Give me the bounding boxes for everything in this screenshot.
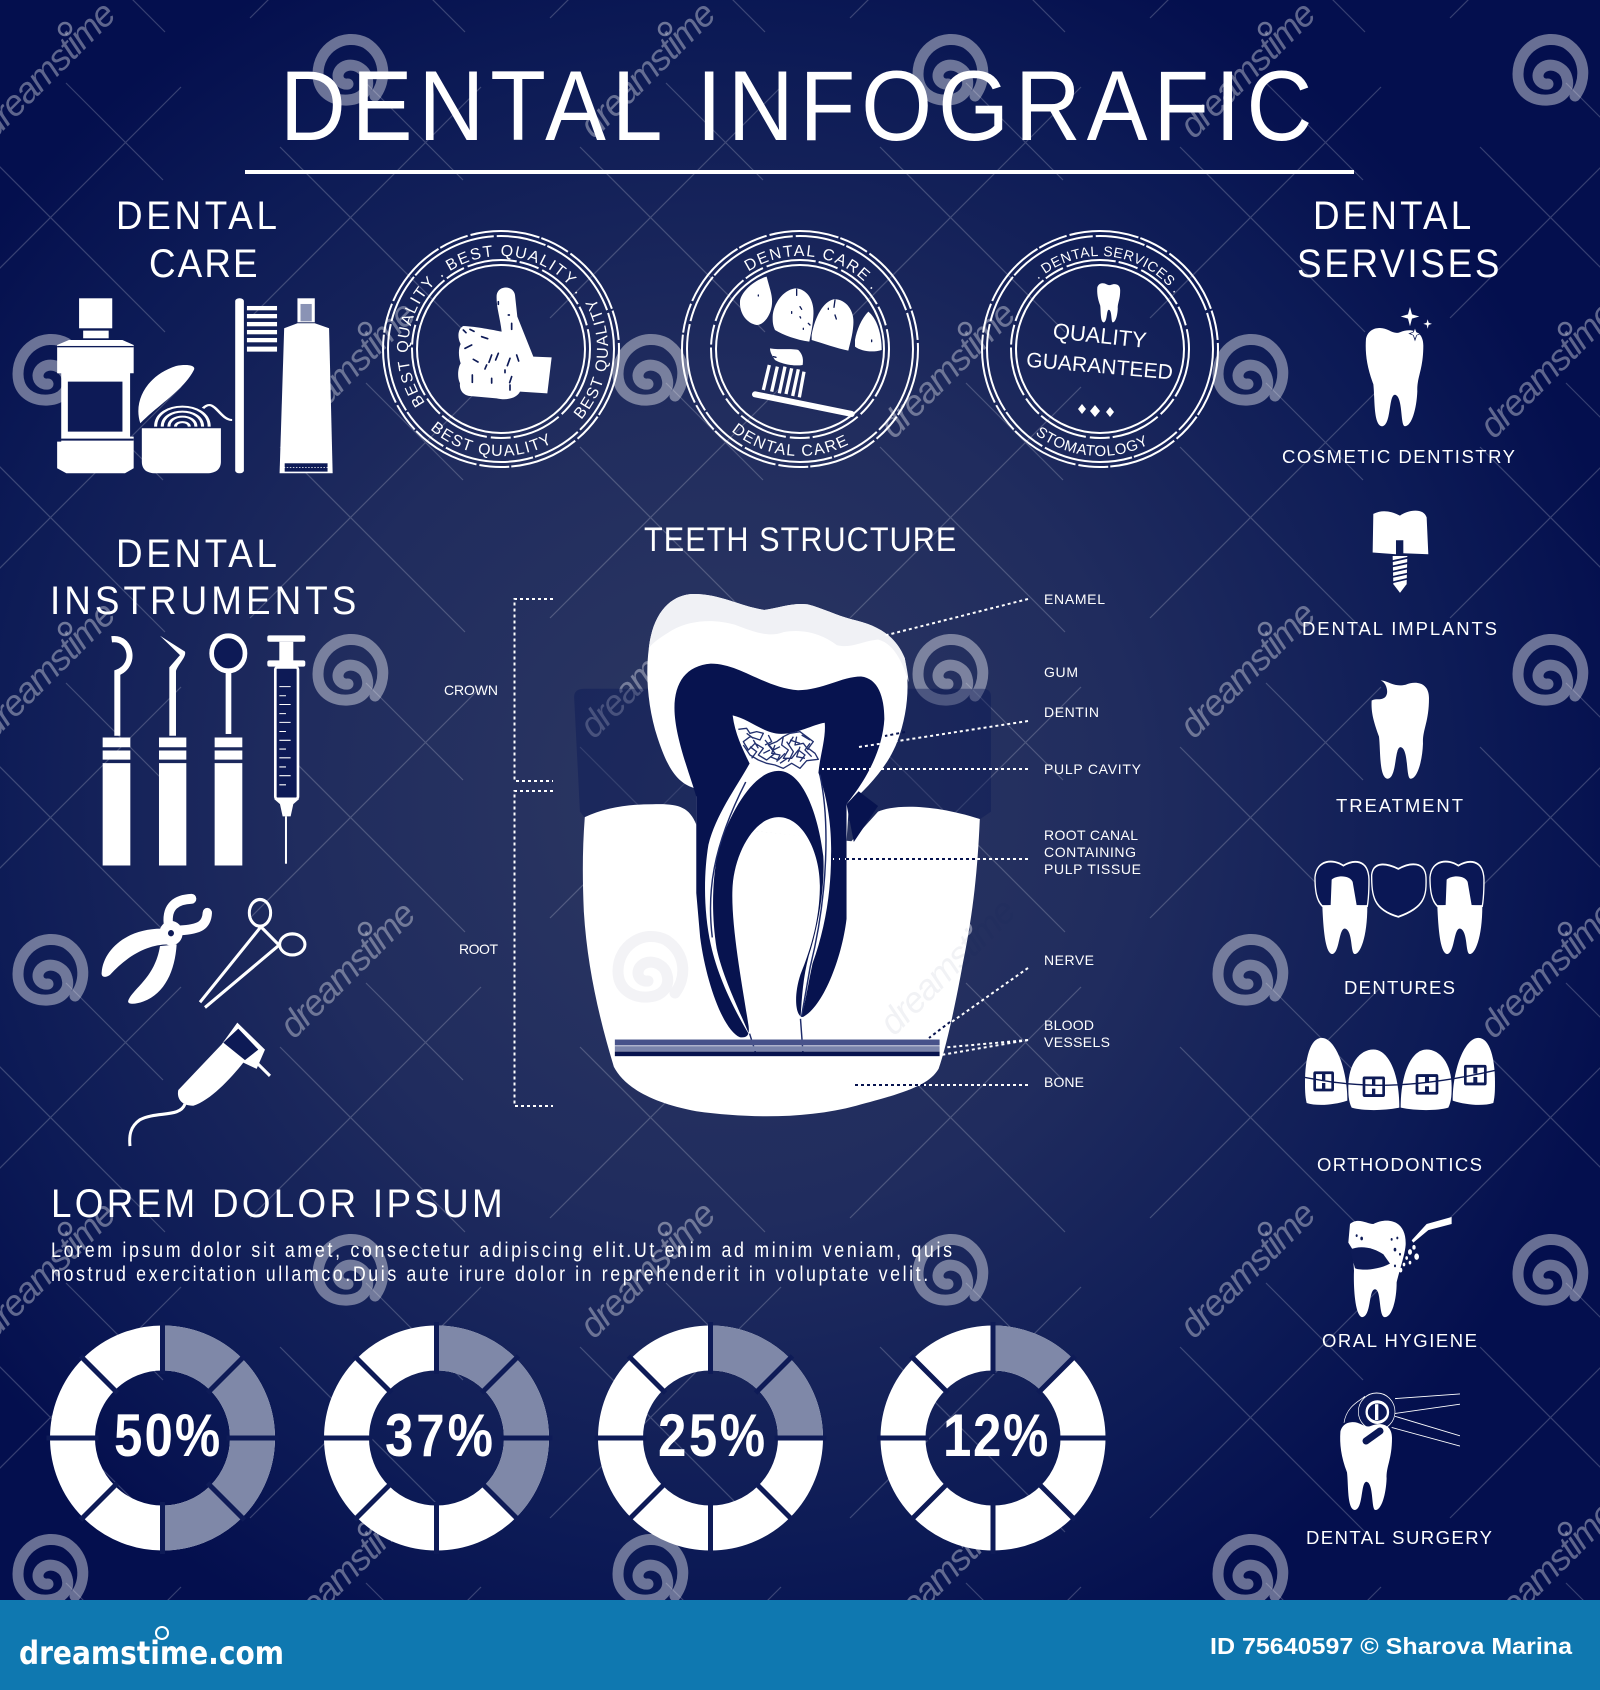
heading: dental care: DENTAL [116,194,277,238]
icon: dental probes [103,636,245,865]
dentin [674,664,884,1037]
stamp: dental care: DENTAL CARE [732,423,848,456]
icon: braces [1305,1038,1495,1110]
icon: surgery tooth [1340,1422,1392,1510]
body text: nostrud exercitation ullamco.Duis aute irure dolor in reprehenderit in voluptate velit. [51,1263,928,1286]
stamp: best quality: BEST QUALITY [574,302,610,419]
stamp: quality guaranteed [981,230,1219,468]
diagram labels: PULP CAVITY [1044,761,1142,777]
heading: dental instruments: DENTAL [116,532,277,576]
brackets and leader lines [514,599,1028,1106]
donut chart: 50%: 50% [114,1402,220,1469]
footer logo: dreamstime.com [19,1634,284,1672]
pulp cavity and root canals [705,715,831,1035]
watermark spirals and text: dreamstime [271,293,424,446]
body text [51,1239,952,1286]
services labels: DENTAL SURGERY [1306,1527,1492,1548]
dental care icons [57,298,333,473]
watermark spirals and text: dreamstime [1171,1193,1324,1346]
donut chart: 50% [46,1322,278,1554]
diagram labels: DENTIN [1044,704,1099,720]
services icons upper [1366,307,1432,779]
heading: dental instruments [50,532,356,623]
icon: toothbrush [235,298,277,473]
body text: Lorem ipsum dolor sit amet, consectetur adipiscing elit.Ut enim ad minim veniam, quis [51,1239,952,1262]
icon: dentures bridge [1315,862,1484,954]
icon: toothpaste tube [280,298,333,473]
heading: lorem dolor ipsum: LOREM DOLOR IPSUM [51,1182,503,1226]
bone [583,804,980,1116]
heading: dental servises [1297,194,1499,286]
icon: cosmetic tooth with sparkles [1366,307,1432,426]
donut chart: 25%: 25% [658,1402,765,1469]
heading: dental servises: DENTAL [1313,194,1471,238]
icon: thumbs up [458,287,552,399]
donut chart: 37%: 37% [385,1402,493,1469]
stamp: quality guaranteed: QUALITY [1052,318,1148,353]
donut chart: 37% [320,1322,552,1554]
watermark spirals and text: dreamstime [1171,593,1324,746]
heading: dental instruments: INSTRUMENTS [50,579,356,623]
dental instruments icons [102,635,305,1146]
heading: dental care [116,194,277,286]
diagram labels: ROOT [459,941,498,957]
stamp: quality guaranteed: STOMATOLOGY [1036,427,1145,456]
diagram labels [444,591,1142,1090]
watermark spirals and text: dreamstime [271,893,424,1046]
icon: mouthwash bottle [57,298,134,473]
diagram labels: BLOOD [1044,1017,1094,1033]
watermark spirals and text: dreamstime [571,593,724,746]
stamp: best quality: BEST QUALITY [431,421,548,458]
diagram: tooth cross-section [574,594,1024,1116]
diagram labels: CROWN [444,682,498,698]
diagram labels: ROOT CANAL [1044,827,1138,843]
icon: damaged tooth [1372,681,1429,779]
diagram labels: CONTAINING [1044,844,1136,860]
diagram labels: GUM [1044,664,1078,680]
nerve and blood vessel bands [615,1040,940,1056]
services labels: ORTHODONTICS [1317,1154,1482,1175]
donut chart: 25% [594,1322,826,1554]
tooth crown [647,594,908,841]
stamp: dental care [681,230,919,468]
stamp: quality guaranteed: . DENTAL SERVICES . [1038,246,1176,293]
services labels: DENTAL IMPLANTS [1302,618,1497,639]
icon: pliers [102,899,207,1004]
watermark spirals and text: dreamstime [871,293,1024,446]
stamp: dental care: DENTAL CARE . [744,245,872,290]
diagram labels: NERVE [1044,952,1094,968]
services labels [1282,446,1515,1548]
watermark spirals and text: dreamstime [571,1193,724,1346]
icon: teeth and toothbrush [740,277,882,414]
diagram labels: PULP TISSUE [1044,861,1141,877]
icon: dental implant [1373,511,1428,593]
services labels: DENTURES [1344,977,1455,998]
stamp: best quality: BEST QUALITY . [445,245,578,294]
donut chart: 12% [877,1322,1109,1554]
donut chart: 12%: 12% [943,1402,1048,1469]
services labels: ORAL HYGIENE [1322,1330,1477,1351]
pulp nerve network [738,728,818,768]
services labels: COSMETIC DENTISTRY [1282,446,1515,467]
icon: syringe [267,635,305,864]
icon: forceps [200,900,305,1008]
diagram labels: VESSELS [1044,1034,1110,1050]
icon: dental surgery instrument [1344,1393,1460,1446]
heading: dental care: CARE [149,242,258,286]
canal nerve strands [710,775,826,1052]
heading: dental servises: SERVISES [1297,242,1499,286]
services labels: TREATMENT [1336,795,1463,816]
gum pocket [847,791,878,842]
diagram labels: BONE [1044,1074,1084,1090]
stamp: best quality: BEST QUALITY . [396,274,444,408]
icon: dental drill [130,1023,270,1146]
icon: oral hygiene tooth [1348,1217,1452,1317]
diagram labels: ENAMEL [1044,591,1105,607]
footer credit: ID 75640597 © Sharova Marina [1210,1633,1572,1659]
stamp: best quality [382,230,620,468]
heading: teeth structure: TEETH STRUCTURE [644,521,956,558]
watermark spirals and text: dreamstime [271,1493,424,1646]
icon: dental floss [138,365,232,473]
gum [574,689,991,821]
stamp: quality guaranteed: GUARANTEED [1025,349,1174,384]
enamel [649,594,909,682]
diagram: tooth cross-section: dreamstime [871,890,1024,1043]
watermark spirals and text: dreamstime [871,1493,1024,1646]
footer bar [0,1600,1600,1690]
services icons lower [1305,862,1495,1446]
title: DENTAL INFOGRAFIC [280,52,1312,162]
